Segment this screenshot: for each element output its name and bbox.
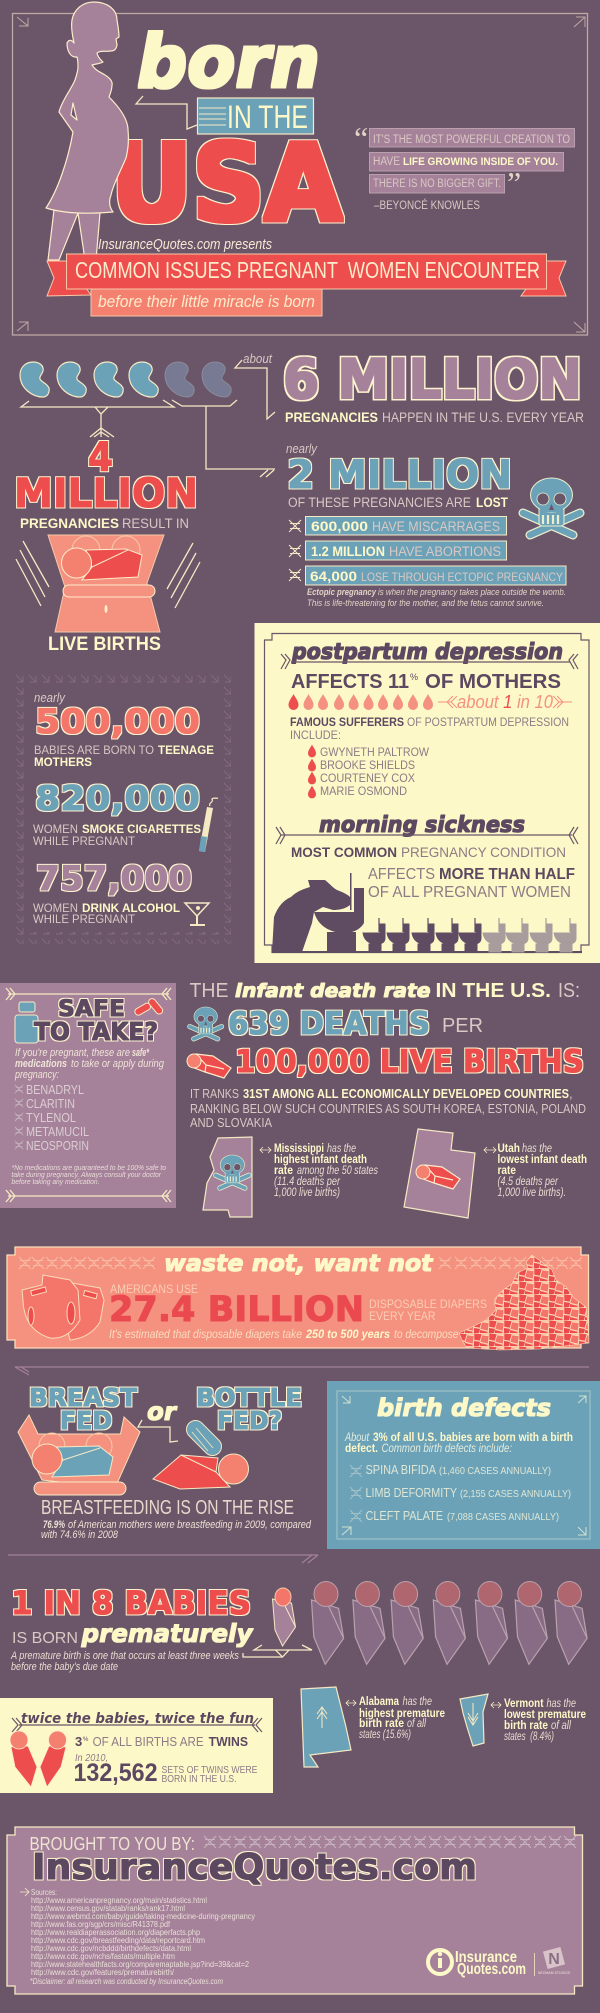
title: born: born xyxy=(137,20,320,105)
breastfeeding statistic xyxy=(41,1519,312,1541)
morning sickness heading: morning sickness xyxy=(319,813,525,838)
stat: 100,000 live births: 100,000 LIVE BIRTHS xyxy=(235,1044,584,1080)
title: in the xyxy=(198,98,314,135)
nearly label: nearly xyxy=(286,441,318,456)
divider xyxy=(15,1367,589,1375)
list: abortions: 1.2 MILLION xyxy=(311,543,385,559)
panel: twins xyxy=(0,1698,273,1793)
connector xyxy=(138,1420,178,1442)
premature definition: A premature birth is one that occurs at least three weeks xyxy=(10,1650,239,1662)
sources: http://www.webmd.com/baby/guide/taking-medicine-during-pregnancy xyxy=(31,1912,255,1921)
medication disclaimer: take during pregnancy. Always consult your doctor xyxy=(12,1170,161,1179)
vermont text: has the xyxy=(546,1698,576,1710)
utah text xyxy=(484,1143,587,1199)
logo separator xyxy=(534,1953,536,1976)
medication list xyxy=(15,1082,89,1153)
intro text: medications xyxy=(15,1058,67,1070)
logo: neomam: N xyxy=(548,1951,560,1968)
insurancequotes wordmark: InsuranceQuotes.com xyxy=(32,1847,477,1888)
medication disclaimer xyxy=(12,1163,166,1186)
breast fed heading xyxy=(29,1383,137,1435)
list: ectopic: LOSE THROUGH ECTOPIC PREGNANCY xyxy=(361,570,563,584)
morning sickness heading xyxy=(276,813,578,844)
logo: insurancequotes: Quotes.com xyxy=(457,1961,526,1978)
intro text xyxy=(344,1430,573,1455)
3 percent of births: TWINS xyxy=(209,1734,248,1749)
intro text: About xyxy=(344,1430,370,1444)
icon: mother and baby xyxy=(16,535,200,632)
affects 11 percent: % xyxy=(410,672,418,682)
icon: diapers xyxy=(22,1275,104,1340)
4 million: MILLION xyxy=(14,471,198,517)
list: abortions: HAVE ABORTIONS xyxy=(389,544,501,559)
panel: premature births xyxy=(10,1582,587,1767)
panel: postpartum depression and morning sickness xyxy=(254,623,600,963)
panel: pregnancies xyxy=(14,348,584,655)
stat: 639 deaths: PER xyxy=(442,1015,483,1037)
mississippi text: Mississippi xyxy=(274,1143,324,1155)
stat: 820,000: 820,000 xyxy=(35,779,200,819)
utah text: rate xyxy=(498,1165,516,1177)
premature definition: before the baby's due date xyxy=(11,1661,118,1673)
decorative x marks xyxy=(19,1257,582,1269)
quote: LIFE GROWING INSIDE OF YOU. xyxy=(403,156,558,168)
4 million: 4 xyxy=(88,435,113,481)
connector line xyxy=(136,96,197,129)
ectopic note: is when the pregnancy takes place outside the womb. xyxy=(378,587,566,597)
intro text: If you're pregnant, these are xyxy=(15,1047,130,1059)
affects 11 percent xyxy=(291,671,561,693)
logo: neomam xyxy=(538,1947,571,1975)
mississippi text: highest infant death xyxy=(274,1154,367,1166)
stat: 639 deaths: 639 DEATHS xyxy=(228,1006,430,1042)
icon: premature baby xyxy=(272,1588,296,1646)
breastfeeding statistic: 76.9% xyxy=(43,1519,65,1531)
live births label: LIVE BIRTHS xyxy=(48,634,161,655)
4 million caption: RESULT IN xyxy=(122,515,189,531)
quote: IT'S THE MOST POWERFUL CREATION TO xyxy=(373,134,570,146)
intro text: Common birth defects include: xyxy=(382,1441,512,1455)
vermont text: Vermont xyxy=(504,1698,544,1710)
panel: teenage smoking alcohol stats xyxy=(14,673,231,944)
caption: teenage mothers: MOTHERS xyxy=(34,755,92,769)
alabama text: highest premature xyxy=(359,1708,445,1720)
intro text: defect. xyxy=(345,1441,378,1455)
list of sufferers: GWYNETH PALTROW xyxy=(320,745,430,759)
subtitle box xyxy=(91,289,322,316)
6 million: 6 MILLION xyxy=(283,348,582,411)
sets of twins: BORN IN THE U.S. xyxy=(162,1774,236,1785)
vermont text: lowest premature xyxy=(504,1709,586,1721)
sources: http://www.census.gov/statab/ranks/rank17.html xyxy=(31,1904,185,1913)
ranking text: IT RANKS xyxy=(190,1086,239,1101)
heading xyxy=(190,980,580,1002)
6 million caption xyxy=(285,409,584,425)
alabama text: of all xyxy=(407,1718,426,1730)
icon: pills xyxy=(134,997,164,1016)
logo: insurancequotes: Insurance xyxy=(455,1949,517,1966)
icon: breastfeeding xyxy=(18,1415,140,1495)
medication disclaimer: before taking any medication. xyxy=(12,1177,100,1186)
alabama text: states (15.6%) xyxy=(359,1729,411,1741)
ectopic note: This is life-threatening for the mother, and the fetus cannot survive. xyxy=(307,598,544,608)
utah text: has the xyxy=(522,1143,552,1155)
ectopic note: Ectopic pregnancy xyxy=(307,587,377,597)
panel: breast fed or bottle fed xyxy=(18,1383,312,1541)
heading: THE xyxy=(190,980,228,1002)
alabama text: Alabama xyxy=(359,1696,400,1708)
3 percent of births: OF ALL BIRTHS ARE xyxy=(93,1734,204,1749)
4 million caption xyxy=(20,515,189,531)
icon row: seven full-term babies xyxy=(312,1582,587,1664)
intro text: safe* xyxy=(132,1047,149,1059)
defect: cleft palate: (7,088 CASES ANNUALLY) xyxy=(447,1512,559,1523)
panel background xyxy=(0,1698,273,1793)
affects more than half: OF ALL PREGNANT WOMEN xyxy=(368,884,571,901)
affects more than half: MORE THAN HALF xyxy=(439,866,575,883)
heading: safe to take: SAFE xyxy=(58,997,125,1022)
sets of twins xyxy=(162,1765,258,1785)
famous sufferers: FAMOUS SUFFERERS xyxy=(290,717,404,729)
utah text: Utah xyxy=(498,1143,520,1155)
sources: Sources: xyxy=(31,1887,57,1897)
breastfeeding caption: BREASTFEEDING IS ON THE RISE xyxy=(41,1497,294,1519)
vermont text xyxy=(491,1698,586,1743)
2 million caption: LOST xyxy=(476,495,509,510)
list of sufferers: COURTENEY COX xyxy=(320,771,415,785)
defect: limb deformity: LIMB DEFORMITY xyxy=(366,1485,457,1500)
map: utah xyxy=(404,1129,475,1218)
affects more than half xyxy=(368,866,575,901)
icon: bottle feeding xyxy=(153,1417,248,1489)
logo: insurancequotes xyxy=(428,1949,526,1978)
list: abortions xyxy=(289,541,506,560)
panel: birth defects xyxy=(327,1381,600,1549)
americans use: AMERICANS USE xyxy=(110,1282,198,1296)
panel: header xyxy=(12,2,588,335)
sources: http://www.realdiaperassociation.org/diaperfacts.php xyxy=(31,1928,201,1937)
drops: 1 in 10 xyxy=(288,694,433,710)
bracket xyxy=(243,1645,312,1657)
alabama text: has the xyxy=(403,1696,432,1708)
is born prematurely: prematurely xyxy=(81,1619,254,1648)
icon: small skull xyxy=(190,1007,222,1039)
most common xyxy=(291,844,566,860)
brought to you by: BROUGHT TO YOU BY: xyxy=(30,1834,195,1854)
quote: HAVE xyxy=(373,156,400,168)
top and bottom dividers xyxy=(6,988,171,1202)
mississippi text: (11.4 deaths per xyxy=(274,1176,341,1188)
logo: neomam: NEOMAM STUDIOS xyxy=(538,1971,571,1975)
utah text: (4.5 deaths per xyxy=(498,1176,559,1188)
decompose text xyxy=(109,1329,458,1341)
panel: infant death rate xyxy=(187,980,587,1218)
breastfeeding statistic: with 74.6% in 2008 xyxy=(41,1529,119,1541)
premature definition xyxy=(10,1650,239,1673)
famous sufferers: OF POSTPARTUM DEPRESSION xyxy=(407,717,569,729)
icon: skull xyxy=(523,478,580,535)
defect: cleft palate xyxy=(350,1508,559,1523)
decompose text: It's estimated that disposable diapers take xyxy=(109,1329,302,1341)
list: miscarriages: HAVE MISCARRAGES xyxy=(372,519,500,534)
sources: http://www.cdc.gov/features/prematurebirth/ xyxy=(31,1968,175,1977)
ranking text xyxy=(190,1086,586,1130)
famous sufferers: INCLUDE: xyxy=(290,730,341,742)
6 million caption: PREGNANCIES xyxy=(285,409,378,425)
nearly label: nearly xyxy=(34,690,66,705)
stat: 132,562: 132,562 xyxy=(74,1759,158,1787)
disposable diapers xyxy=(369,1297,487,1323)
heading: birth defects xyxy=(377,1394,551,1422)
toilets: more than half xyxy=(363,918,576,952)
heading: IS: xyxy=(558,980,580,1002)
sources xyxy=(20,1887,255,1986)
map: vermont xyxy=(460,1694,488,1746)
caption: smoking: WOMEN xyxy=(33,822,78,836)
disposable diapers: EVERY YEAR xyxy=(369,1309,436,1323)
panel: credits xyxy=(7,1827,582,1994)
most common: PREGNANCY CONDITION xyxy=(401,844,566,860)
in 2010: In 2010, xyxy=(75,1752,108,1764)
affects 11 percent: AFFECTS 11 xyxy=(291,671,409,693)
breastfeeding statistic: of American mothers were breastfeeding in 2009, compared xyxy=(68,1519,312,1531)
subtitle box: before their little miracle is born xyxy=(98,292,315,311)
famous sufferers xyxy=(290,717,569,742)
quote: THERE IS NO BIGGER GIFT. xyxy=(373,178,501,190)
affects 11 percent: OF MOTHERS xyxy=(425,671,561,693)
presenter line: InsuranceQuotes.com presents xyxy=(98,237,272,253)
heading: 1 in 8 babies: 1 IN 8 BABIES xyxy=(11,1584,251,1622)
list of sufferers: BROOKE SHIELDS xyxy=(320,758,415,772)
decompose text: to decompose xyxy=(394,1329,458,1341)
panel background xyxy=(7,1827,582,1994)
3 percent of births: % xyxy=(83,1737,89,1743)
bottle fed heading: FED? xyxy=(217,1406,282,1435)
map: mississippi xyxy=(203,1137,252,1217)
icon: cigarette xyxy=(199,798,218,852)
vermont text: birth rate xyxy=(504,1720,548,1732)
4 million xyxy=(14,435,198,517)
defect: limb deformity: (2,155 CASES ANNUALLY) xyxy=(460,1489,571,1500)
alabama text: birth rate xyxy=(359,1718,404,1730)
caption: teenage mothers: TEENAGE xyxy=(158,743,214,757)
quote: –BEYONCÉ KNOWLES xyxy=(374,199,480,212)
caption: alcohol: WHILE PREGNANT xyxy=(33,912,136,926)
alabama text xyxy=(346,1696,445,1741)
heading: safe to take: TO TAKE? xyxy=(34,1017,158,1046)
heading: safe to take xyxy=(34,997,158,1046)
ribbon xyxy=(47,254,566,296)
medication list: BENADRYL xyxy=(26,1082,84,1097)
sources: http://www.cdc.gov/ncbddd/birthdefects/data.html xyxy=(31,1944,191,1953)
utah text: lowest infant death xyxy=(498,1154,587,1166)
icon: diaper pile xyxy=(459,1255,589,1350)
2 million: 2 MILLION xyxy=(287,453,512,498)
panel background xyxy=(327,1381,600,1549)
defect: spina bifida: (1,460 CASES ANNUALLY) xyxy=(439,1466,551,1477)
mississippi text xyxy=(260,1143,378,1199)
defect: spina bifida xyxy=(350,1462,551,1477)
arrow border xyxy=(14,673,231,944)
utah text: 1,000 live births). xyxy=(498,1187,566,1199)
decorative x marks xyxy=(204,1836,576,1848)
caption: alcohol: WOMEN xyxy=(33,901,78,915)
medication list: CLARITIN xyxy=(26,1096,75,1111)
title: in the: IN THE xyxy=(227,99,308,135)
sources: http://www.fas.org/sgp/crs/misc/R41378.pdf xyxy=(31,1920,171,1929)
divider xyxy=(8,1555,318,1563)
defect: limb deformity xyxy=(350,1485,571,1500)
panel background xyxy=(254,623,600,963)
panel: waste not want not xyxy=(7,1247,589,1350)
mississippi text: has the xyxy=(327,1143,356,1155)
list: ectopic: 64,000 xyxy=(310,568,357,584)
caption: smoking xyxy=(33,822,201,848)
intro text xyxy=(14,1047,165,1081)
list of sufferers xyxy=(308,745,430,798)
bottle fed heading xyxy=(196,1383,302,1435)
brackets and arrows xyxy=(21,360,275,477)
sets of twins: SETS OF TWINS WERE xyxy=(162,1765,258,1776)
breast fed heading: FED xyxy=(60,1406,112,1435)
mississippi text: rate xyxy=(274,1165,293,1177)
heading: IN THE U.S. xyxy=(436,980,551,1002)
ectopic note xyxy=(307,587,566,608)
quote: ” xyxy=(507,165,521,201)
icon: martini xyxy=(185,903,209,925)
heading: infant death rate xyxy=(235,980,431,1002)
decompose text: 250 to 500 years xyxy=(305,1329,390,1341)
icon: pill bottle xyxy=(15,1002,38,1043)
list of sufferers: MARIE OSMOND xyxy=(320,784,407,798)
caption: smoking: SMOKE CIGARETTES xyxy=(82,822,201,836)
sources: *Disclaimer: all research was conducted by InsuranceQuotes.com xyxy=(30,1977,223,1986)
list: miscarriages xyxy=(289,516,506,535)
defect: spina bifida: SPINA BIFIDA xyxy=(366,1462,436,1477)
mississippi text: among the 50 states xyxy=(297,1165,378,1177)
banner background xyxy=(7,1247,588,1348)
panel: safe to take xyxy=(0,983,176,1208)
stat: 757,000: 757,000 xyxy=(36,859,192,899)
mississippi text: 1,000 live births) xyxy=(274,1187,340,1199)
panel background xyxy=(0,983,176,1208)
header frame xyxy=(12,14,588,335)
caption: teenage mothers xyxy=(34,743,214,769)
stat: 500,000: 500,000 xyxy=(35,702,200,742)
postpartum heading: postpartum depression xyxy=(291,640,563,665)
stat: 27.4 billion: 27.4 BILLION xyxy=(109,1290,364,1330)
about label: about xyxy=(243,351,273,366)
caption: alcohol: DRINK ALCOHOL xyxy=(82,901,180,915)
list: ectopic xyxy=(289,566,566,585)
affects more than half: AFFECTS xyxy=(368,866,435,883)
4 million caption: PREGNANCIES xyxy=(20,515,119,531)
medication disclaimer: *No medications are guaranteed to be 100% safe to xyxy=(12,1163,166,1172)
icon: woman at toilet xyxy=(272,873,582,953)
bottle fed heading: BOTTLE xyxy=(196,1383,302,1412)
sources: http://www.statehealthfacts.org/comparemaptable.jsp?ind=39&cat=2 xyxy=(31,1960,249,1969)
quote xyxy=(354,120,574,212)
title: USA: USA xyxy=(111,122,342,245)
ranking text: , xyxy=(569,1086,573,1101)
intro text: pregnancy: xyxy=(14,1069,59,1081)
breast fed heading: BREAST xyxy=(29,1383,137,1412)
defect: cleft palate: CLEFT PALATE xyxy=(366,1508,443,1523)
heading: waste not, want not xyxy=(164,1251,434,1277)
disposable diapers: DISPOSABLE DIAPERS xyxy=(369,1297,487,1311)
medication list: METAMUCIL xyxy=(26,1124,89,1139)
vermont text: of all xyxy=(551,1720,571,1732)
list: miscarriages: 600,000 xyxy=(311,518,368,534)
sources: http://www.cdc.gov/nchs/fastats/multiple.htm xyxy=(31,1952,175,1961)
sources: http://www.americanpregnancy.org/main/statistics.html xyxy=(31,1896,207,1905)
medication list: NEOSPORIN xyxy=(26,1138,89,1153)
caption: smoking: WHILE PREGNANT xyxy=(33,834,136,848)
heading: twice the babies, twice the fun xyxy=(21,1711,254,1727)
pregnant woman silhouette xyxy=(46,2,128,260)
or label: or xyxy=(147,1397,178,1426)
map: alabama xyxy=(301,1687,351,1767)
quote: “ xyxy=(354,120,368,156)
icon: swaddled baby xyxy=(187,1054,231,1078)
3 percent of births: 3 xyxy=(75,1734,82,1749)
medication list: TYLENOL xyxy=(26,1110,76,1125)
vermont text: states (8.4%) xyxy=(504,1731,554,1743)
most common: MOST COMMON xyxy=(291,844,397,860)
about 1 in 10: about 1 in 10 xyxy=(457,692,553,712)
icon: twins xyxy=(10,1731,66,1787)
caption: teenage mothers: BABIES ARE BORN TO xyxy=(34,743,154,757)
is born prematurely: IS BORN xyxy=(12,1630,78,1647)
sources: http://www.cdc.gov/breastfeeding/data/reportcard.htm xyxy=(31,1936,205,1945)
ranking text: AND SLOVAKIA xyxy=(190,1115,272,1130)
2 million caption: OF THESE PREGNANCIES ARE xyxy=(288,495,471,510)
intro text: to take or apply during xyxy=(71,1058,165,1070)
fetus row xyxy=(20,362,231,397)
caption: alcohol xyxy=(33,901,180,926)
